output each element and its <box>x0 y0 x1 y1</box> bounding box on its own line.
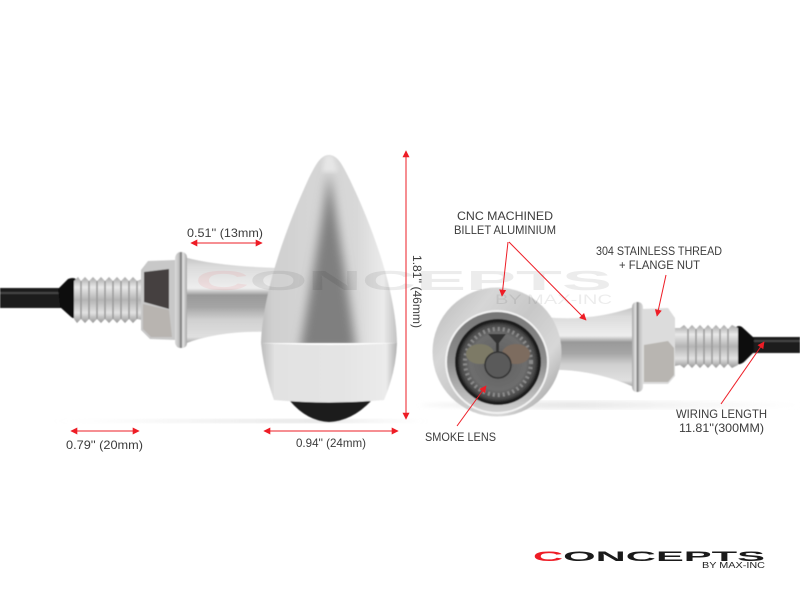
dimension: 0.79in thread length: 0.79'' (20mm) <box>66 438 143 452</box>
callout: CNC machined billet aluminium <box>454 209 586 320</box>
bullet body <box>261 155 397 350</box>
logo: Concepts by Max-Inc: BY MAX-INC <box>702 561 765 570</box>
callout: wiring length: 11.81''(300MM) <box>679 421 764 435</box>
side view: indicator <box>0 155 397 422</box>
callout: stainless thread and flange nut <box>596 244 722 316</box>
flange nut <box>642 308 675 384</box>
flange nut <box>141 260 176 340</box>
callout: stainless thread and flange nut: 304 STAINLESS THREAD <box>596 244 722 258</box>
callout: wiring length <box>676 342 767 435</box>
callout: CNC machined billet aluminium: BILLET ALUMINIUM <box>454 223 556 237</box>
front view: indicator <box>432 288 800 416</box>
flange washer <box>175 252 187 348</box>
neck <box>545 307 634 387</box>
flange washer <box>632 302 643 392</box>
thread <box>675 325 738 368</box>
cable <box>750 337 800 353</box>
neck <box>184 257 278 344</box>
lens dome <box>290 401 371 422</box>
watermark: C ONCEPTS <box>195 265 612 296</box>
watermark: BY MAX-INC <box>495 291 612 307</box>
callout: wiring length: WIRING LENGTH <box>676 407 767 421</box>
watermark <box>195 265 612 307</box>
smoke lens <box>455 319 541 405</box>
bezel <box>445 310 549 414</box>
dimension: 0.79in thread length <box>66 431 143 452</box>
thread <box>74 277 142 323</box>
logo: Concepts by Max-Inc: C ONCEPTS <box>533 548 765 564</box>
rubber boot <box>58 278 76 318</box>
dimension: 1.81in body height: 1.81'' (46mm) <box>410 255 424 328</box>
head housing <box>432 288 562 416</box>
callout: stainless thread and flange nut: + FLANGE NUT <box>619 258 701 272</box>
infographic canvas <box>0 150 800 568</box>
cable <box>0 288 64 308</box>
dimension: 0.94in body width: 0.94'' (24mm) <box>296 436 366 450</box>
logo: Concepts by Max-Inc <box>533 548 765 570</box>
callout: smoke lens <box>425 386 496 444</box>
dimension: 0.51in neck length: 0.51'' (13mm) <box>187 226 263 240</box>
rubber boot <box>736 326 754 364</box>
ground shadows <box>50 401 800 423</box>
callout: CNC machined billet aluminium: CNC MACHINED <box>457 209 553 223</box>
callout: smoke lens: SMOKE LENS <box>425 430 496 444</box>
dimension: 0.94in body width <box>264 431 398 450</box>
bullet band <box>261 343 397 402</box>
